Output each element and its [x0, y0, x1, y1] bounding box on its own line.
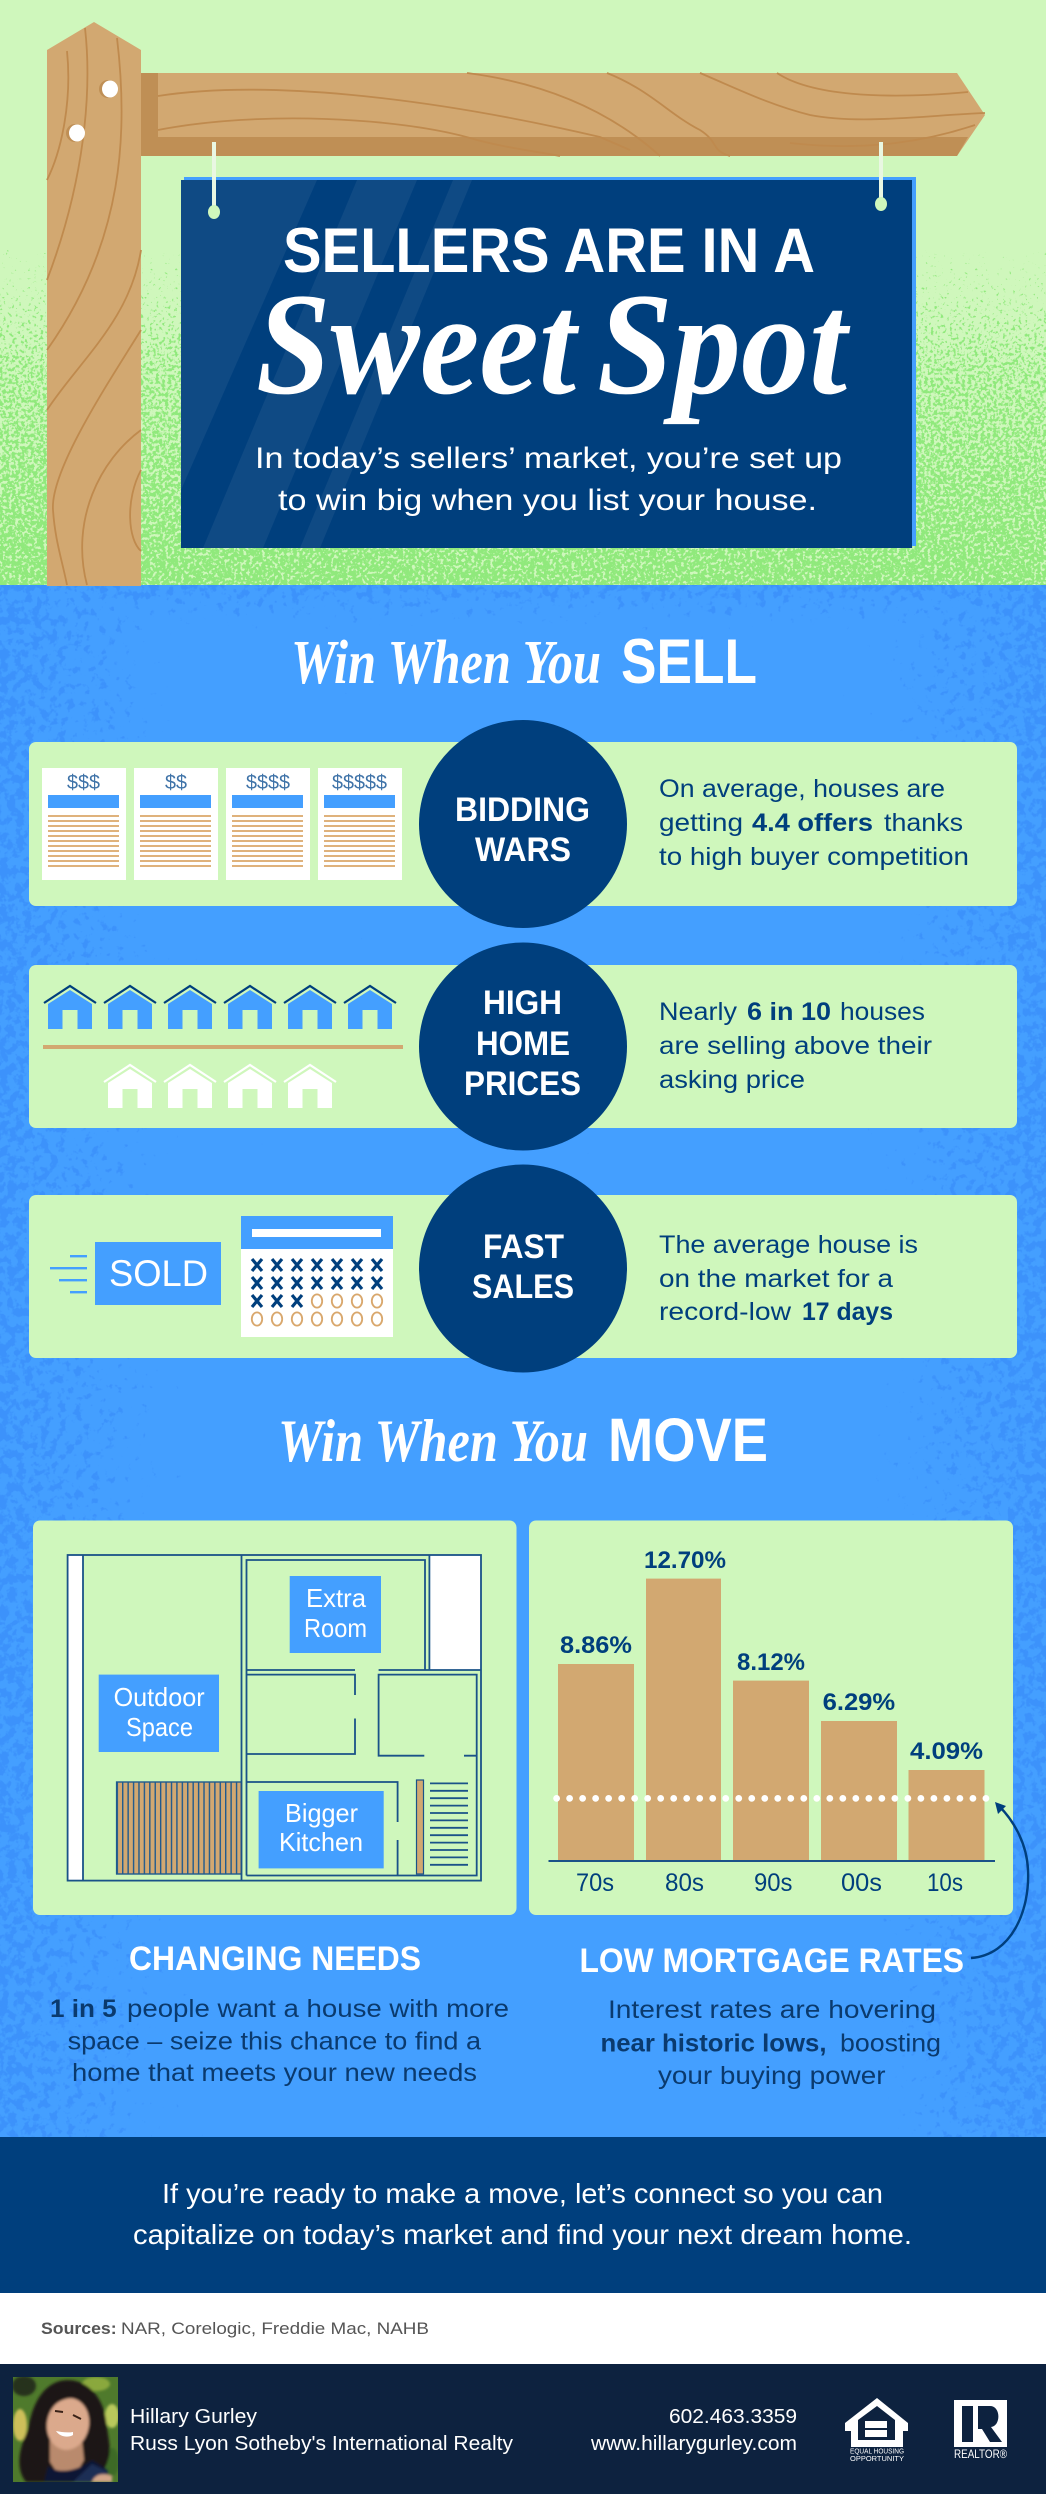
text: fast sales description: on the market for a: [659, 1265, 893, 1293]
label: outdoor space: Space: [126, 1712, 193, 1742]
label: extra room: Extra: [306, 1583, 367, 1613]
heading: win when you sell: SELL: [621, 627, 757, 697]
text: high home prices description: [659, 998, 932, 1094]
sign heading: Sweet: [256, 263, 580, 425]
agent name and company: Hillary Gurley: [130, 2406, 257, 2428]
text: high home prices description: are selling above their: [659, 1032, 932, 1060]
panel: high home prices: [29, 942, 1017, 1150]
panel: bidding wars: [29, 720, 1017, 928]
deck: [117, 1782, 241, 1874]
panel: fast sales: [29, 1164, 1017, 1372]
text block: changing needs: home that meets your new needs: [72, 2059, 477, 2087]
text: bidding wars description: [659, 775, 969, 871]
agent phone and website: www.hillarygurley.com: [590, 2433, 797, 2455]
sign heading: [256, 216, 851, 425]
sign subheading: to win big when you list your house.: [278, 484, 817, 517]
white yard strips: [68, 1555, 481, 1880]
icon: equal housing opportunity: EQUAL HOUSING: [850, 2446, 904, 2456]
text block: low mortgage rates: [580, 1942, 964, 2090]
sign post arm: [141, 73, 985, 156]
icon: calendar of days on market: [241, 1216, 393, 1337]
dotted current-rate line: [557, 1795, 986, 1802]
decade axis labels: 00s: [841, 1869, 882, 1897]
circle: fast sales label: [419, 1164, 627, 1372]
text: fast sales description: 17 days: [802, 1298, 893, 1326]
text: bidding wars description: getting: [659, 809, 743, 837]
call to action band: [0, 2137, 1046, 2293]
blue section background: [0, 585, 1046, 2137]
text: high home prices description: Nearly: [659, 998, 738, 1026]
text: bidding wars description: thanks: [884, 809, 963, 837]
text block: low mortgage rates: near historic lows,: [600, 2030, 826, 2058]
decade axis labels: 80s: [665, 1869, 704, 1897]
icon: sold sign with speed lines: SOLD: [109, 1253, 208, 1294]
decade axis labels: [576, 1869, 963, 1897]
icon: realtor mark: [954, 2400, 1007, 2461]
text: bidding wars description: On average, houses are: [659, 775, 945, 803]
sign heading: SELLERS ARE IN A: [283, 216, 815, 286]
chart axis: [548, 1860, 995, 1862]
text block: low mortgage rates: Interest rates are hovering: [608, 1996, 936, 2024]
label: bigger kitchen: Bigger: [285, 1798, 358, 1828]
decade axis labels: 10s: [927, 1869, 963, 1897]
agent phone and website: 602.463.3359: [669, 2406, 797, 2428]
circle: high home prices label: [419, 942, 627, 1150]
icon: four offer documents: $$$$$: [332, 772, 387, 794]
sign heading: Spot: [597, 263, 851, 425]
bar value labels: 6.29%: [823, 1689, 895, 1716]
label: outdoor space: [99, 1675, 219, 1752]
label: extra room: Room: [304, 1613, 367, 1643]
icon: four houses below the line: [104, 1065, 336, 1108]
text: high home prices description: asking price: [659, 1066, 805, 1094]
agent photo: [12, 2376, 119, 2482]
floor plan walls: [68, 1555, 481, 1881]
decade axis labels: 70s: [576, 1869, 614, 1897]
circle: fast sales label: FAST: [483, 1228, 564, 1266]
icon: equal housing opportunity: OPPORTUNITY: [850, 2454, 904, 2463]
sign subheading: [255, 442, 842, 517]
icon: sold sign with speed lines: [50, 1242, 221, 1305]
heading: win when you move: Win When You: [278, 1408, 588, 1474]
icon: four offer documents: $$$: [67, 772, 100, 794]
text: bidding wars description: to high buyer competition: [659, 843, 969, 871]
text block: changing needs: [50, 1940, 509, 2087]
hanging sign: [181, 142, 916, 548]
panel: floor plan: [33, 1520, 516, 1915]
circle: bidding wars label: [419, 720, 627, 928]
agent name and company: Russ Lyon Sotheby's International Realty: [130, 2433, 513, 2455]
agent name and company: [130, 2406, 513, 2455]
circle: high home prices label: HOME: [476, 1025, 570, 1063]
asking price divider line: [43, 1045, 403, 1049]
circle: bidding wars label: WARS: [475, 831, 571, 869]
text block: changing needs: space – seize this chance to find a: [68, 2028, 481, 2056]
sign post upright: [47, 22, 141, 586]
heading: win when you move: MOVE: [608, 1406, 768, 1474]
icon: six houses above the line: [44, 986, 396, 1029]
text: high home prices description: houses: [840, 998, 925, 1026]
bar value labels: 8.86%: [560, 1632, 632, 1659]
heading: win when you sell: Win When You: [291, 629, 601, 697]
icon: four offer documents: $$$$: [246, 772, 290, 794]
text block: changing needs: people want a house with more: [127, 1995, 509, 2023]
bar value labels: 8.12%: [737, 1649, 805, 1676]
icon: four offer documents: $$: [165, 772, 187, 794]
text block: low mortgage rates: boosting: [840, 2030, 941, 2058]
call to action band: If you’re ready to make a move, let’s connect so you can: [162, 2178, 883, 2209]
text block: low mortgage rates: your buying power: [658, 2062, 886, 2090]
text block: low mortgage rates: LOW MORTGAGE RATES: [580, 1942, 964, 1980]
text: fast sales description: [659, 1231, 918, 1326]
call to action band: capitalize on today’s market and find your next dream home.: [133, 2219, 912, 2250]
hero background: sky and grass: [0, 0, 1046, 586]
decade axis labels: 90s: [754, 1869, 792, 1897]
panel: mortgage rate bar chart: [529, 1520, 1013, 1915]
circle: fast sales label: SALES: [472, 1268, 574, 1306]
face details: [56, 2431, 73, 2437]
text: fast sales description: The average house is: [659, 1231, 918, 1259]
agent phone and website: [590, 2406, 797, 2455]
text: high home prices description: 6 in 10: [747, 998, 831, 1026]
bar value labels: [560, 1547, 983, 1765]
label: bigger kitchen: [259, 1791, 384, 1868]
label: extra room: [290, 1576, 381, 1653]
label: bigger kitchen: Kitchen: [279, 1827, 363, 1857]
sources line: Sources:: [41, 2319, 117, 2338]
icon: equal housing opportunity: [845, 2398, 908, 2463]
bar value labels: 12.70%: [644, 1547, 726, 1574]
arrow: from low mortgage rates to dotted line: [971, 1802, 1028, 1958]
circle: bidding wars label: BIDDING: [455, 791, 590, 829]
circle: high home prices label: HIGH: [483, 984, 562, 1022]
icon: realtor mark: REALTOR®: [954, 2449, 1007, 2461]
sign subheading: In today’s sellers’ market, you’re set up: [255, 442, 842, 475]
bars: [558, 1579, 984, 1861]
text block: changing needs: CHANGING NEEDS: [129, 1940, 421, 1978]
circle: high home prices label: PRICES: [464, 1065, 581, 1103]
staircase: [416, 1780, 468, 1874]
footer band: [0, 2364, 1046, 2494]
text block: changing needs: 1 in 5: [50, 1995, 117, 2023]
bar value labels: 4.09%: [910, 1738, 983, 1765]
sign hangers: [208, 142, 887, 219]
text: bidding wars description: 4.4 offers: [752, 809, 873, 837]
icon: four offer documents: [42, 768, 402, 880]
sources line: NAR, Corelogic, Freddie Mac, NAHB: [121, 2319, 429, 2338]
label: outdoor space: Outdoor: [114, 1682, 205, 1712]
text: fast sales description: record-low: [659, 1298, 792, 1326]
